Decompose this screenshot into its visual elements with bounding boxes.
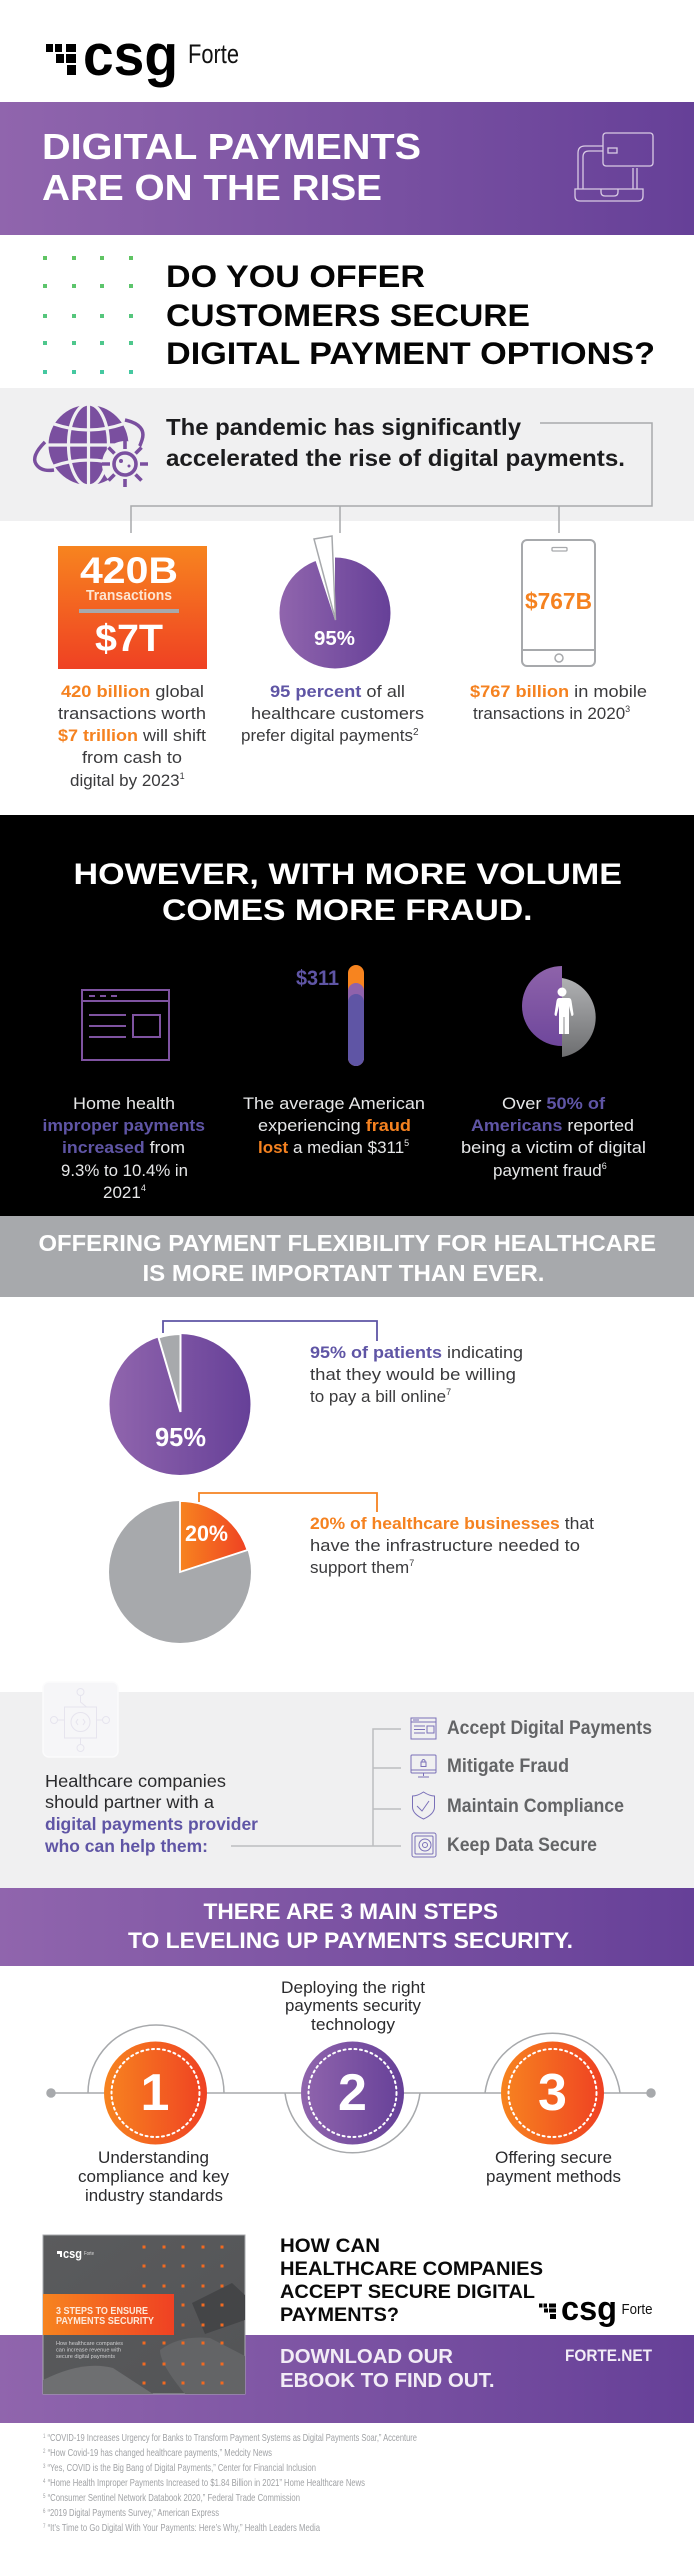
text: partner statement: digital payments provider — [45, 1814, 258, 1834]
caption: 50 percent of americans: being a victim of digital — [461, 1138, 646, 1157]
footnotes: “It’s Time to Go Digital With Your Payments: Here’s Why,” Health Leaders Media — [45, 2522, 320, 2534]
caption: 767 billion: $767 billion in mobile — [470, 682, 647, 701]
callout line: 20 percent — [199, 1493, 377, 1512]
caption: 95 percent: 95 percent of all — [270, 682, 405, 701]
logo: CSG Forte header: csg — [83, 23, 178, 88]
label: keep data secure: Keep Data Secure — [447, 1835, 597, 1856]
caption: fraud lost: experiencing fraud — [258, 1116, 411, 1135]
text: 95 percent of patients: 95% of patients indicating — [310, 1343, 523, 1362]
ebook subtitle: How healthcare companies — [56, 2341, 123, 2347]
footnotes: “2019 Digital Payments Survey,” American Express — [45, 2507, 219, 2519]
dot grid: green decoration — [43, 256, 133, 374]
text: 95 percent of patients: 7 — [446, 1387, 451, 1397]
caption: fraud lost: 5 — [404, 1138, 409, 1148]
text: pandemic statement: accelerated the rise of digital payments. — [166, 445, 625, 471]
text: 95 percent of patients: to pay a bill online — [310, 1387, 446, 1406]
chart: $311 thermometer — [296, 965, 364, 1066]
caption: 420 billion: from cash to — [82, 748, 182, 767]
icon: phone with $767B — [522, 540, 595, 666]
caption: 420 billion: digital by 2023 — [70, 771, 180, 790]
step 2: payments security — [285, 1997, 422, 2015]
panel: partner band — [0, 1682, 694, 1888]
text: 95 percent of patients: that they would be willing — [310, 1365, 516, 1384]
logo: CSG Forte header: Forte — [188, 39, 239, 69]
step 3: payment methods — [486, 2168, 621, 2186]
footnotes: 4 — [43, 2479, 46, 2485]
step 3 — [486, 2042, 621, 2186]
caption: 95 percent: 2 — [413, 727, 419, 738]
heading: how can healthcare companies — [280, 2235, 543, 2326]
panel: pandemic band — [0, 388, 694, 521]
icon: faint API card — [43, 1682, 118, 1757]
caption: 420 billion: 420 billion global — [61, 682, 204, 701]
chart: 95 percent pie with pulled wedge: 95% — [314, 628, 355, 650]
text: 20 percent of healthcare businesses: support them — [310, 1558, 409, 1577]
step 3: Offering secure — [495, 2149, 612, 2167]
panel: fraud section — [0, 815, 694, 1216]
text: partner statement: should partner with a — [45, 1792, 214, 1812]
chart: 20 percent pie: 20% — [185, 1521, 228, 1546]
step 1: Understanding — [98, 2149, 209, 2167]
text: pandemic statement — [166, 414, 625, 471]
footnotes: 2 — [43, 2449, 46, 2455]
ebook subtitle: secure digital payments — [56, 2354, 115, 2360]
heading: more fraud: HOWEVER, WITH MORE VOLUME — [74, 858, 622, 891]
caption: 50 percent of americans: Americans reported — [471, 1116, 634, 1135]
icon: globe with virus — [35, 404, 148, 487]
icon: shield check — [412, 1792, 434, 1819]
chart: $311 thermometer: $311 — [296, 967, 339, 990]
caption: 420 billion: 1 — [180, 771, 185, 781]
logo: CSG Forte small: csg — [561, 2290, 617, 2328]
step 3: 3 — [538, 2064, 567, 2122]
caption: 767 billion: 3 — [625, 704, 630, 714]
heading: more fraud: COMES MORE FRAUD. — [162, 894, 532, 927]
stat: 420B box — [58, 546, 207, 669]
footnotes: 7 — [43, 2524, 46, 2530]
chart: 20 percent pie — [109, 1501, 251, 1643]
chart: 95 percent pie with pulled wedge — [280, 536, 390, 668]
step 1: industry standards — [85, 2187, 223, 2205]
caption: 50 percent of americans — [461, 1094, 646, 1180]
ebook cover — [43, 2235, 245, 2394]
footnotes: “How Covid-19 has changed healthcare payments,” Medcity News — [45, 2447, 272, 2459]
ebook logo: csg — [63, 2246, 82, 2261]
footnotes: 1 — [43, 2434, 46, 2440]
heading: how can healthcare companies: HEALTHCARE COMPANIES — [280, 2258, 543, 2280]
callout line: 95 percent — [163, 1321, 377, 1341]
label: mitigate fraud: Mitigate Fraud — [447, 1756, 569, 1777]
step 1: 1 — [141, 2064, 169, 2122]
step 2 — [281, 1979, 425, 2144]
banner: download CTA: FORTE.NET — [565, 2346, 653, 2365]
caption: 95 percent — [241, 682, 424, 745]
text: 20 percent of healthcare businesses — [310, 1514, 594, 1577]
ebook title box — [43, 2294, 174, 2335]
footnotes: 6 — [43, 2509, 46, 2515]
logo: CSG Forte header — [46, 23, 239, 88]
banner: three main steps — [0, 1888, 694, 1966]
heading: do you offer: DIGITAL PAYMENT OPTIONS? — [166, 335, 655, 371]
caption: improper payments: Home health — [73, 1094, 175, 1113]
ebook dot grid — [142, 2246, 224, 2384]
ebook title box: 3 STEPS TO ENSURE — [56, 2306, 148, 2317]
text: partner statement: Healthcare companies — [45, 1771, 226, 1791]
icon: accept payments window — [411, 1718, 436, 1739]
caption: fraud lost — [243, 1094, 425, 1157]
ebook title box: PAYMENTS SECURITY — [56, 2316, 154, 2327]
banner: three main steps: THERE ARE 3 MAIN STEPS — [204, 1899, 498, 1924]
connector tree — [231, 1729, 401, 1846]
caption: improper payments: 2021 — [103, 1183, 141, 1202]
chart: 95 percent of patients pie: 95% — [155, 1422, 206, 1452]
text: 95 percent of patients — [310, 1343, 523, 1406]
footnotes: “COVID-19 Increases Urgency for Banks to Transform Payment Systems as Digital Payments Soar,” Accenture — [45, 2432, 417, 2444]
text: 20 percent of healthcare businesses: have the infrastructure needed to — [310, 1536, 580, 1555]
banner: payment flexibility — [0, 1216, 694, 1297]
footnotes: 5 — [43, 2494, 46, 2500]
banner: digital payments title: ARE ON THE RISE — [42, 167, 382, 208]
caption: improper payments: 9.3% to 10.4% in — [61, 1161, 188, 1180]
heading: more fraud — [74, 858, 622, 927]
icon: phone with $767B: $767B — [525, 588, 592, 614]
icon: monitor lock — [411, 1755, 436, 1777]
text: 20 percent of healthcare businesses: 20% of healthcare businesses that — [310, 1514, 594, 1533]
heading: do you offer — [166, 258, 655, 371]
caption: 95 percent: healthcare customers — [251, 704, 424, 723]
step 2: Deploying the right — [281, 1979, 425, 1997]
caption: improper payments: increased from — [62, 1138, 185, 1157]
icon: safe — [412, 1833, 436, 1857]
heading: how can healthcare companies: PAYMENTS? — [280, 2304, 399, 2326]
footnotes: 3 — [43, 2464, 46, 2470]
footnotes: “Home Health Improper Payments Increased to $1.84 Billion in 2021” Home Healthcare News — [45, 2477, 365, 2489]
caption: 767 billion: transactions in 2020 — [473, 704, 625, 723]
caption: fraud lost: The average American — [243, 1094, 425, 1113]
timeline line with arcs — [47, 2025, 655, 2153]
banner: payment flexibility: OFFERING PAYMENT FLEXIBILITY FOR HEALTHCARE — [38, 1230, 656, 1256]
caption: improper payments — [42, 1094, 205, 1202]
label: accept digital payments: Accept Digital Payments — [447, 1718, 652, 1739]
step 1: compliance and key — [78, 2168, 230, 2186]
text: partner statement — [44, 1771, 258, 1856]
icon: laptop and card — [575, 133, 653, 201]
ebook subtitle — [56, 2341, 123, 2360]
ebook subtitle: can increase revenue with — [56, 2348, 121, 2354]
heading: do you offer: DO YOU OFFER — [166, 258, 425, 294]
banner: download CTA — [0, 2335, 694, 2423]
ebook logo — [57, 2246, 94, 2261]
banner: payment flexibility: IS MORE IMPORTANT THAN EVER. — [142, 1260, 544, 1286]
caption: 95 percent: prefer digital payments — [241, 726, 413, 745]
stat: 420B box: Transactions — [86, 587, 172, 604]
logo: CSG Forte small — [539, 2290, 652, 2328]
banner: download CTA: EBOOK TO FIND OUT. — [280, 2370, 494, 2392]
footnotes: “Consumer Sentinel Network Databook 2020,” Federal Trade Commission — [45, 2492, 300, 2504]
caption: 420 billion: transactions worth — [58, 704, 206, 723]
banner: download CTA: DOWNLOAD OUR — [280, 2346, 454, 2368]
text: pandemic statement: The pandemic has significantly — [166, 414, 521, 440]
icon: browser window — [82, 990, 169, 1060]
label: maintain compliance: Maintain Compliance — [447, 1796, 624, 1817]
caption: 50 percent of americans: Over 50% of — [502, 1094, 605, 1113]
caption: 420 billion: $7 trillion will shift — [58, 726, 206, 745]
banner: digital payments title — [0, 102, 694, 235]
step 1 — [78, 2042, 230, 2205]
caption: 767 billion — [470, 682, 647, 723]
heading: do you offer: CUSTOMERS SECURE — [166, 297, 530, 333]
caption: improper payments: 4 — [141, 1183, 146, 1193]
chart: person split circle — [522, 966, 596, 1057]
text: 20 percent of healthcare businesses: 7 — [409, 1558, 414, 1568]
footnotes — [43, 2432, 417, 2534]
logo: CSG Forte small: Forte — [622, 2301, 652, 2318]
heading: how can healthcare companies: ACCEPT SECURE DIGITAL — [280, 2281, 535, 2303]
heading: how can healthcare companies: HOW CAN — [280, 2235, 380, 2257]
ebook logo: Forte — [84, 2251, 94, 2257]
step 2: 2 — [338, 2064, 367, 2122]
stat: 420B box: 420B — [80, 550, 178, 591]
chart: 95 percent of patients pie — [110, 1334, 250, 1475]
step 2: technology — [311, 2016, 396, 2034]
caption: 420 billion — [58, 682, 206, 790]
caption: 50 percent of americans: 6 — [602, 1161, 607, 1171]
text: partner statement: who can help them: — [44, 1836, 208, 1856]
footnotes: “Yes, COVID is the Big Bang of Digital Payments,” Center for Financial Inclusion — [45, 2462, 316, 2474]
caption: improper payments: improper payments — [42, 1116, 205, 1135]
banner: three main steps: TO LEVELING UP PAYMENTS SECURITY. — [128, 1928, 573, 1953]
stat: 420B box: $7T — [95, 618, 163, 660]
caption: fraud lost: lost a median $311 — [258, 1138, 404, 1157]
banner: digital payments title: DIGITAL PAYMENTS — [42, 126, 421, 167]
connector lines — [131, 423, 652, 533]
caption: 50 percent of americans: payment fraud — [493, 1161, 602, 1180]
